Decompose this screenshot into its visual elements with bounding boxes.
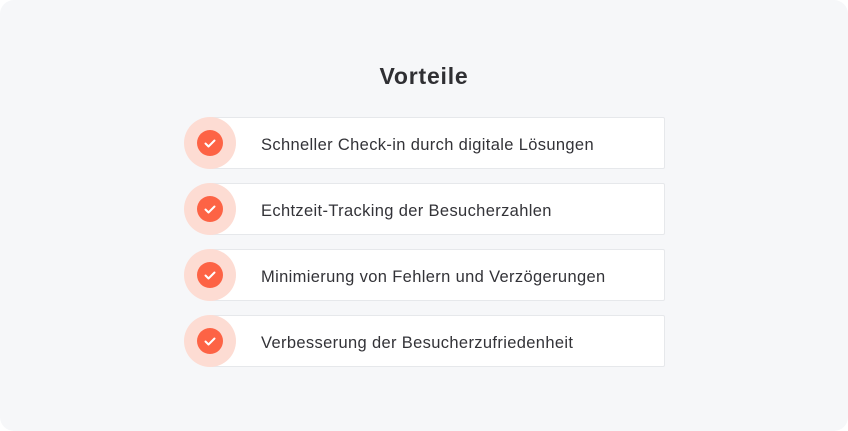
title: Vorteile (379, 63, 469, 89)
item 2 (184, 183, 665, 235)
text: Minimierung von Fehlern und Verzögerungen (261, 268, 606, 286)
text: Verbesserung der Besucherzufriedenheit (261, 334, 573, 352)
item 3 (184, 249, 665, 301)
item 1 (184, 117, 665, 169)
icon: check (184, 249, 236, 301)
text: Schneller Check-in durch digitale Lösungen (261, 136, 594, 154)
item 4 (184, 315, 665, 367)
text: Echtzeit-Tracking der Besucherzahlen (261, 202, 552, 220)
icon: check (184, 183, 236, 235)
icon: check (184, 315, 236, 367)
icon: check (184, 117, 236, 169)
